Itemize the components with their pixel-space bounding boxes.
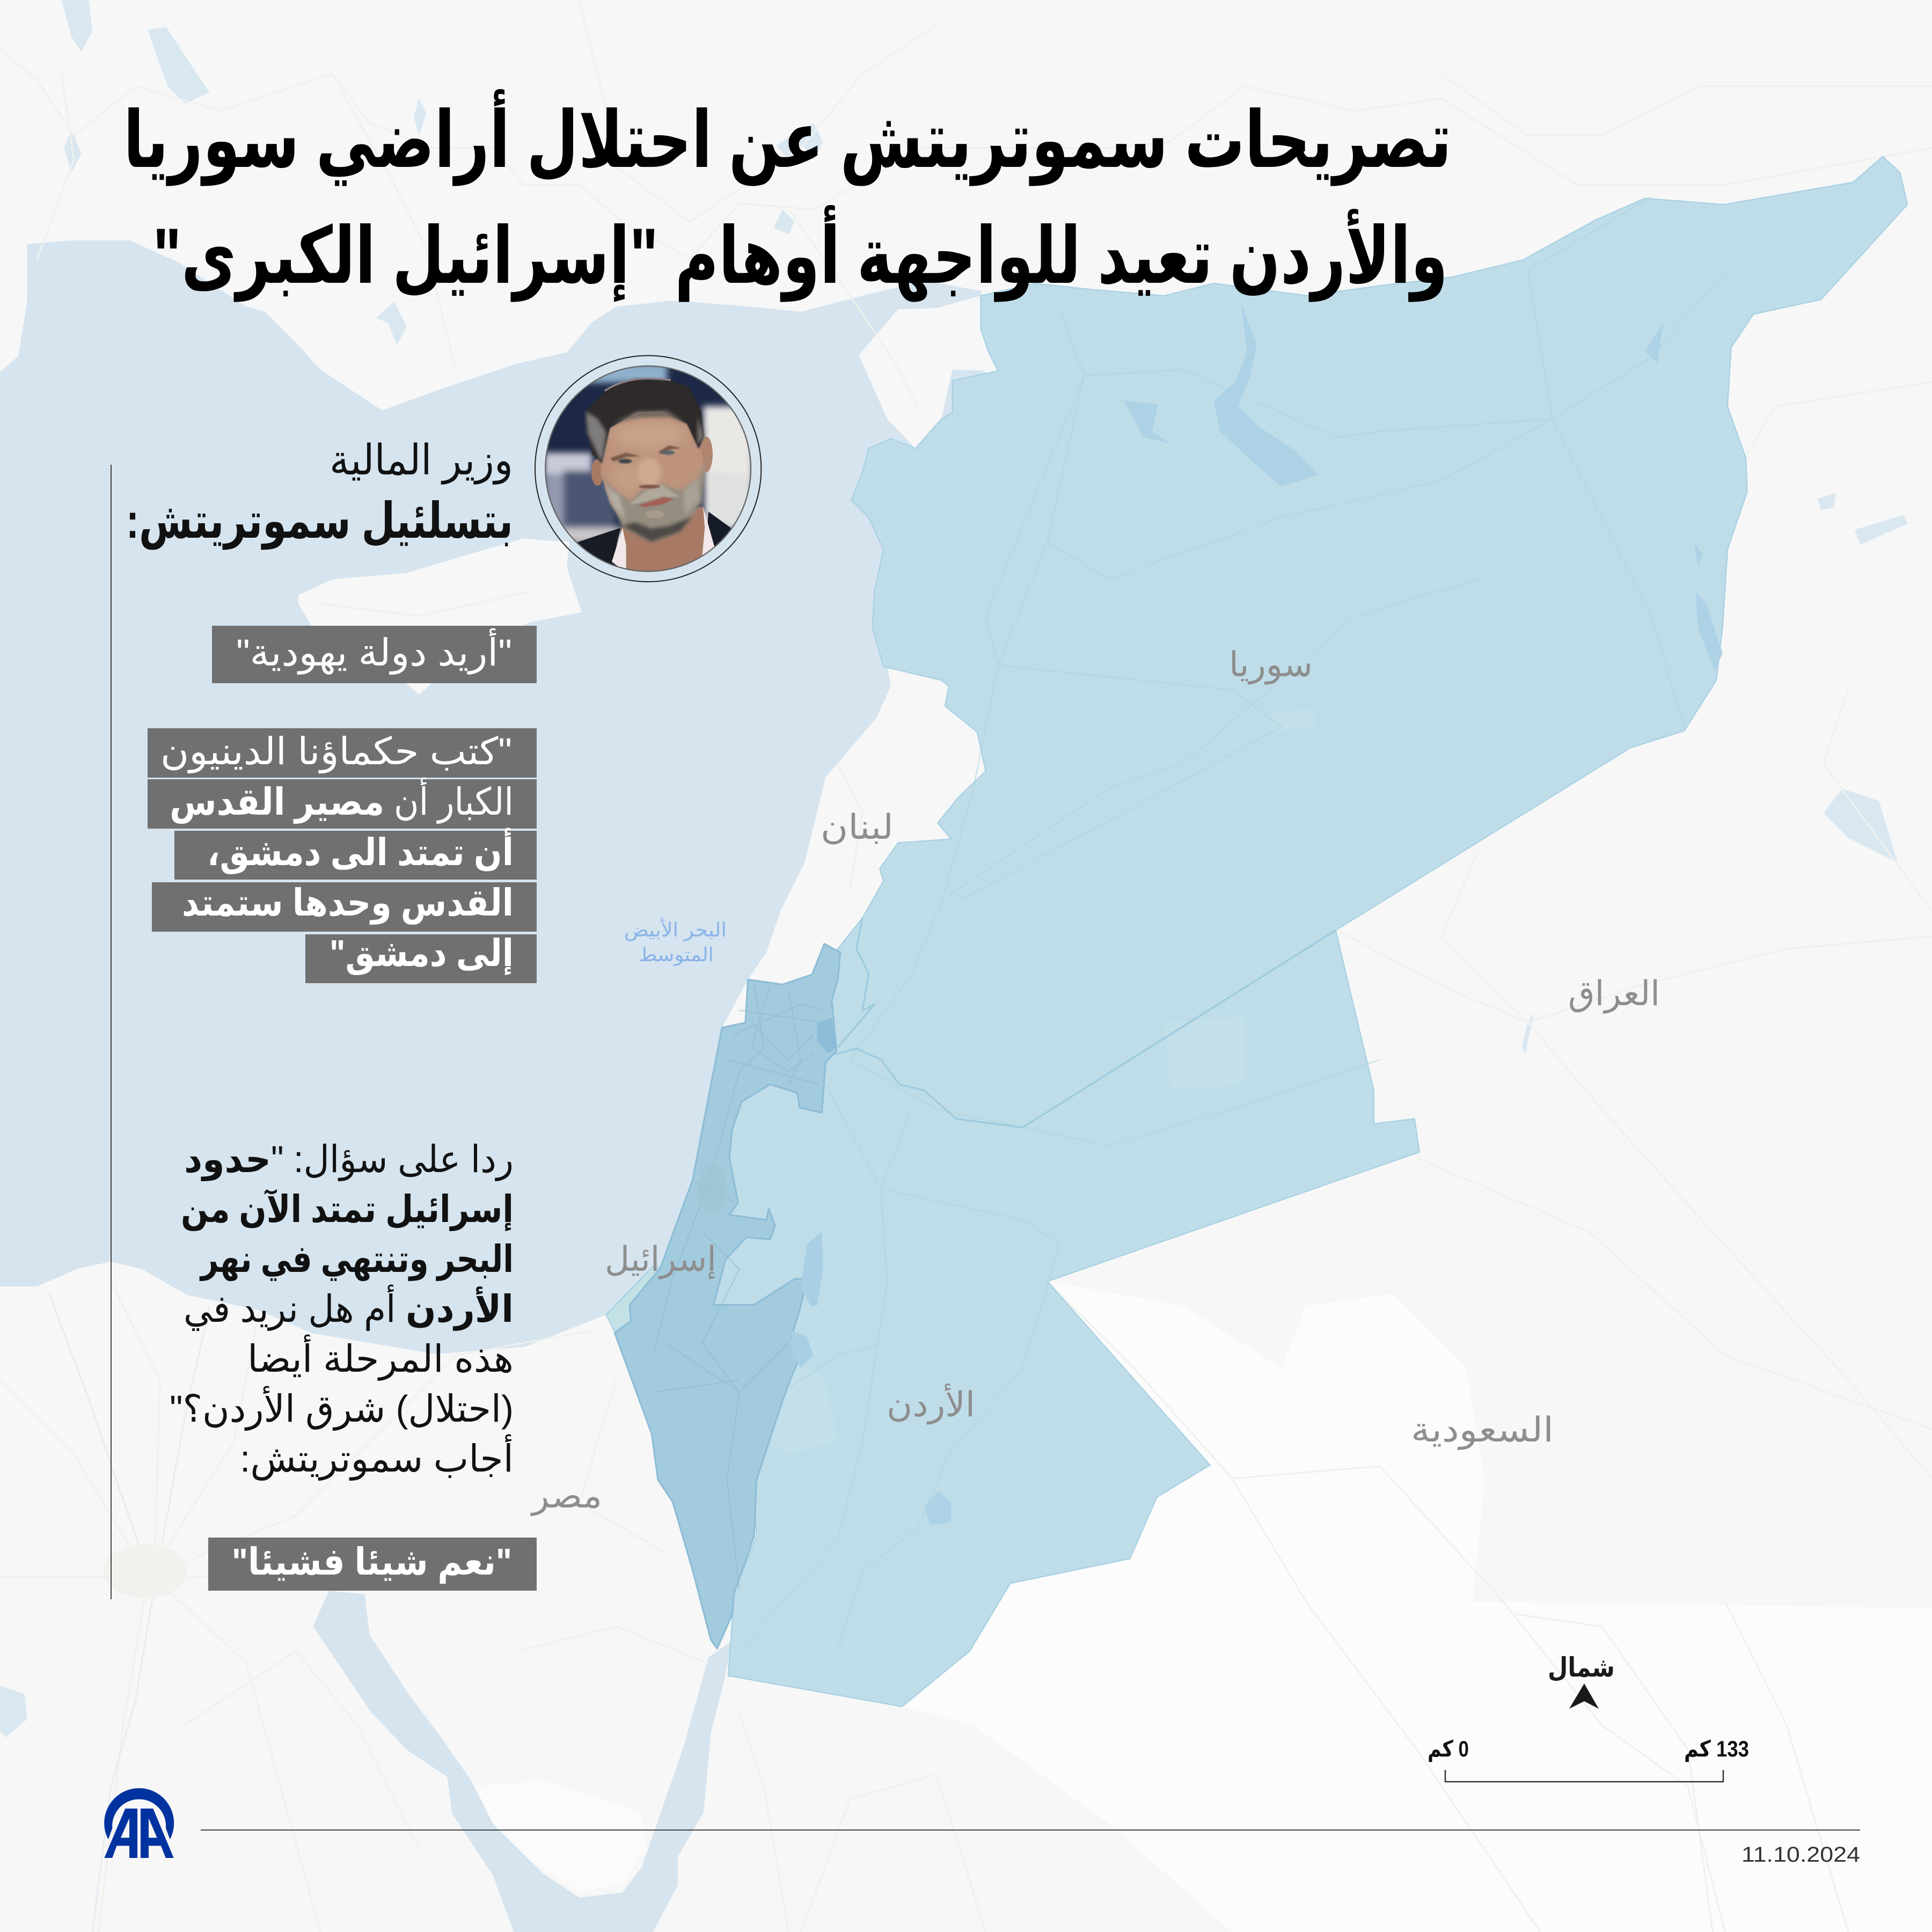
river Nile [49, 1294, 209, 1932]
Sea of Galilee [817, 1018, 837, 1053]
sea: Mediterranean [0, 240, 986, 1354]
lips [639, 497, 674, 507]
question line 2: إسرائيل تمتد الآن من [181, 1188, 514, 1232]
question text [170, 1138, 514, 1481]
collar [612, 528, 626, 573]
title line 1: تصريحات سموتريتش عن احتلال أراضي سوريا [123, 89, 1452, 186]
map labels [530, 645, 1660, 1516]
scale label 133: 133 كم [1684, 1736, 1749, 1762]
label: Lebanon: لبنان [821, 808, 894, 846]
answer box [208, 1538, 537, 1591]
label: Mediterranean line 2: المتوسط [639, 943, 714, 966]
quote 2 line 5: إلى دمشق" [330, 932, 514, 976]
Dead Sea [791, 1231, 823, 1367]
pale desert patches [906, 1282, 1932, 1932]
person name: بتسلئيل سموتريتش: [126, 494, 513, 550]
question line 5: هذه المرحلة أيضا [247, 1334, 514, 1381]
jacket [577, 528, 620, 565]
role: وزير المالية [330, 436, 513, 485]
roads: Israel network [653, 986, 825, 1590]
kippah edge [605, 378, 671, 391]
portrait of Smotrich [535, 356, 761, 582]
title line 2: والأردن تعيد للواجهة أوهام "إسرائيل الكبرى" [153, 204, 1448, 302]
land: Sinai pale patch [474, 1781, 647, 1891]
date: 11.10.2024 [1741, 1843, 1860, 1867]
face skin [601, 411, 705, 523]
brows and eyes [610, 452, 640, 462]
label: Iraq: العراق [1568, 974, 1660, 1014]
label: Saudi Arabia: السعودية [1411, 1410, 1554, 1450]
label: Jordan: الأردن [887, 1383, 975, 1425]
ears [591, 459, 604, 486]
land: Hatay wedge [859, 296, 998, 449]
scale label 0: 0 كم [1428, 1736, 1469, 1762]
name block [126, 436, 513, 550]
lakes inside Syria [924, 323, 1723, 1525]
quote 1 box [212, 626, 537, 683]
vertical rule [111, 465, 112, 1599]
quote 1 text: "أريد دولة يهودية" [236, 628, 512, 675]
hair [586, 378, 704, 463]
label: Mediterranean: البحر الأبيض [624, 918, 727, 941]
urban Tel Aviv [697, 1165, 727, 1213]
title [123, 89, 1452, 302]
land: Cyprus [298, 538, 582, 695]
neck [620, 507, 705, 571]
answer text: "نعم شيئا فشيئا" [232, 1541, 512, 1584]
label: Syria: سوريا [1229, 645, 1313, 685]
question line 3: البحر وتنتهي في نهر [200, 1238, 514, 1281]
north indicator [1548, 1652, 1615, 1709]
sea: Gulfs of Suez and Aqaba [313, 1591, 732, 1932]
quote 2 [148, 728, 537, 983]
question line 1: ردا على سؤال: "حدود [184, 1138, 514, 1181]
greater region: Syria and Jordan [715, 157, 1907, 1707]
Israel [615, 944, 840, 1649]
logo: Anadolu Agency [104, 1788, 174, 1858]
beard [601, 460, 706, 541]
north indicator: شمال [1548, 1652, 1615, 1682]
quote 2 line 2: الكبار أن مصير القدس [170, 777, 514, 824]
West Bank [712, 1084, 822, 1308]
lighter patches inside region [764, 708, 1316, 1454]
Euphrates lake [1213, 302, 1319, 487]
icon: north arrow [1569, 1684, 1599, 1709]
Syria-Jordan border lines [828, 918, 1336, 1128]
label: Egypt: مصر [530, 1476, 602, 1516]
scale bar [1428, 1736, 1749, 1782]
question line 7: أجاب سموتريتش: [240, 1434, 514, 1481]
quote 2 line 1: "كتب حكماؤنا الدينيون [160, 730, 512, 774]
question line 4: الأردن أم هل نريد في [184, 1284, 514, 1331]
moustache [630, 485, 680, 504]
question line 6: (احتلال) شرق الأردن؟" [170, 1386, 514, 1431]
nose [638, 458, 661, 487]
Gaza [606, 1267, 661, 1332]
roads within Syria and Jordan [740, 197, 1725, 1651]
footer rule [201, 1829, 1860, 1831]
quote 2 line 3: أن تمتد الى دمشق، [207, 828, 514, 874]
label: Israel: إسرائيل [605, 1240, 716, 1279]
quote 2 line 4: القدس وحدها ستمتد [182, 882, 514, 925]
city cluster: Cairo [104, 1544, 187, 1598]
